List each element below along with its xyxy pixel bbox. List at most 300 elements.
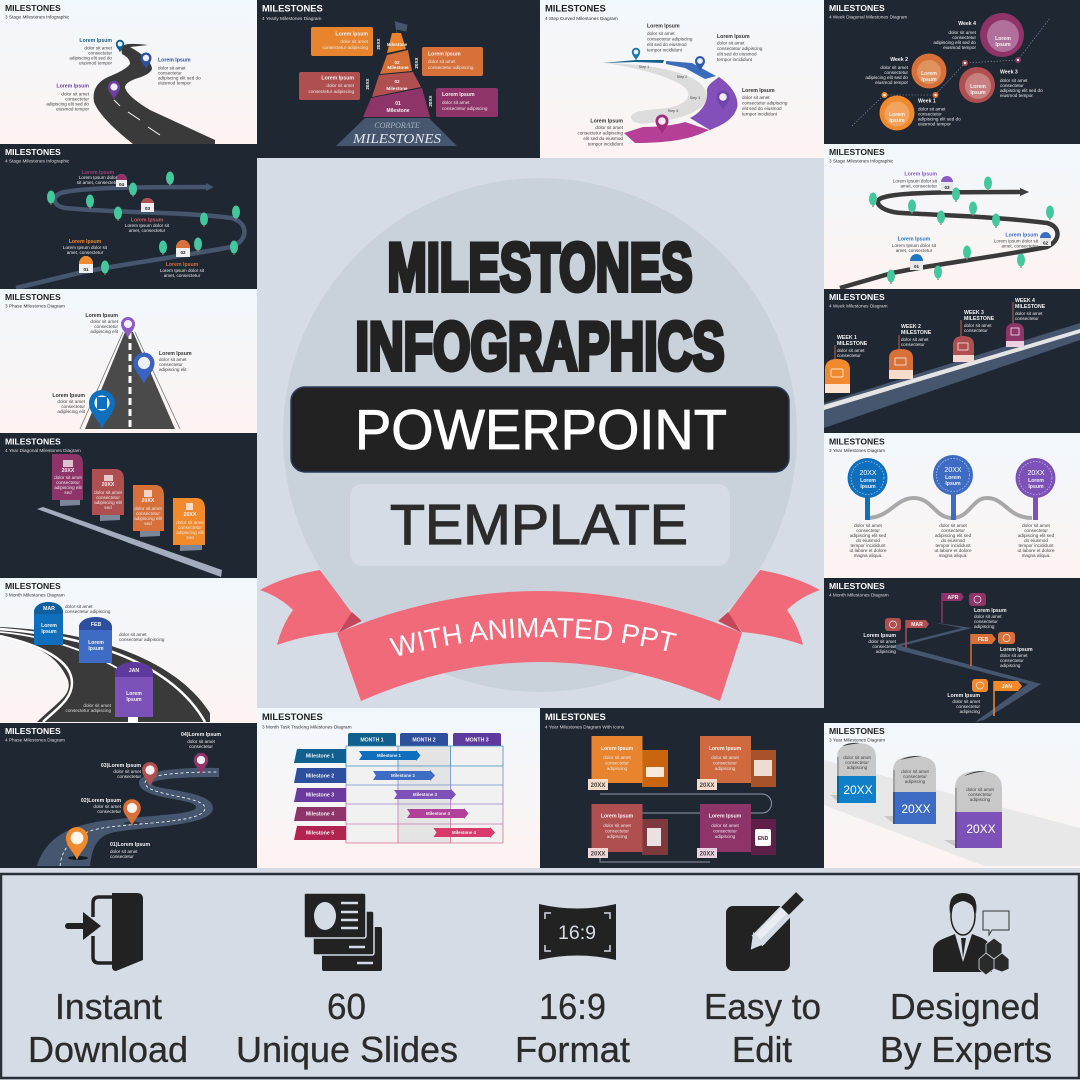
panel: 4 month flags on zigzag road: consectetur [1000,658,1024,663]
panel: 4 yearly pyramid: MILESTONES [352,132,441,147]
panel: 3 phase straight road: dolor sit amet [57,399,86,404]
panel: 3 month task tracking table: Milestone 4 [452,830,477,835]
panel: 3 year lollipop timeline: Ipsum [860,484,876,490]
panel: 4 step curved diagram: consectetur adipiscing [717,46,763,51]
panel: 3 stage light road with trees: Lorem Ipsum dolor sit [893,178,938,184]
panel: 3 phase straight road: dolor sit amet [159,357,187,362]
panel: 4 month flags on zigzag road: dolor sit amet [868,639,897,644]
panel: 3 year tombstone markers: adipiscing [905,779,926,784]
panel: 4 year diagonal cards [0,433,257,578]
panel: 3 stage light road with trees: amet, consectetur [896,248,933,253]
panel: 3 month task tracking table: Milestone 3 [413,792,438,797]
panel: 3 month task tracking table: Milestone 2 [391,773,416,778]
panel: 3 month road with markers: dolor sit amet [65,604,93,609]
panel: 4 step curved diagram: Lorem Ipsum [717,34,750,40]
panel: 4 week diagonal diagram: Ipsum [970,90,986,96]
panel: 4 month flags on zigzag road: adipiscing [876,649,896,654]
panel: 3 stage light road with trees: 02 [1043,240,1048,246]
panel: 4 year diagram with icons: dolor sit amet [603,755,632,760]
title line two: INFOGRAPHICS [356,308,724,384]
panel: 3 year lollipop timeline: magna aliqua. [939,553,967,558]
panel: 4 yearly pyramid: consectetur adipiscing [323,45,368,50]
panel: 4 step curved diagram: dolor sit amet [742,95,770,100]
panel: 4 yearly pyramid: 02 [394,79,400,84]
panel: 4 week ascending road: WEEK 3 [964,310,984,316]
panel: 3 month road with markers: consectetur adipiscing [65,609,111,614]
panel: 4 year diagonal cards: 20XX [184,512,197,518]
panel: 3 month task tracking table: Milestone 3 [306,792,334,798]
label: instant download: Download [28,1029,188,1070]
panel: 4 yearly pyramid: Milestone [387,42,408,47]
panel: 4 yearly pyramid: Milestone [387,65,409,70]
panel: 3 year tombstone markers: consectetur [903,774,927,779]
template badge: TEMPLATE [390,493,688,557]
panel: 4 yearly pyramid: Lorem Ipsum [321,76,354,82]
panel: 4 step curved diagram: tempor incididunt [742,112,778,116]
panel: 3 year lollipop timeline: do eiusmod [856,538,880,543]
panel: 3 stage road infographic: eiusmod tempor [56,106,89,112]
label: 16:9 format: 16:9 [539,986,606,1027]
panel: 3 year tombstone markers: MILESTONES [829,726,885,736]
panel: 4 week ascending road: WEEK 4 [1015,298,1035,304]
panel: 3 stage light road with trees: 03 [944,185,950,190]
powerpoint badge [291,387,789,472]
panel: 4 year diagram with icons: Lorem Ipsum [709,746,742,752]
panel: 4 stage dark road: 02 [180,250,186,255]
label: 16:9 format: Format [515,1029,630,1070]
panel: 4 yearly pyramid: dolor sit amet [340,39,369,44]
panel: 3 month task tracking table: Milestone 1 [377,753,402,758]
panel: 4 year diagonal cards: consectetur [178,525,202,530]
panel: 3 month road with markers: JAN [129,668,139,674]
panel: 3 stage road infographic: adipiscing elit sed do [46,102,89,106]
panel: 3 stage road infographic: dolor sit amet [61,92,90,96]
panel: 4 month flags on zigzag road: dolor sit amet [952,699,981,704]
panel: 3 month task tracking table: Milestone 2 [306,774,334,780]
panel: 4 yearly pyramid: dolor sit amet [428,59,456,64]
panel: 3 phase straight road: MILESTONES [5,292,61,302]
panel: 4 year diagonal cards: dolor sit amet [176,520,205,525]
label: easy to edit: Edit [732,1029,792,1070]
panel: 4 year diagram with icons: 20XX [700,852,714,858]
panel: 3 phase straight road: Lorem Ipsum [159,351,192,357]
panel: 4 month flags on zigzag road: adipiscing [1000,663,1021,668]
panel: 4 month flags on zigzag road: adipiscing [960,709,980,714]
panel: 3 stage road infographic: Lorem Ipsum [56,84,89,90]
panel: 4 month flags on zigzag road: consectetur [974,619,998,624]
panel: 4 year diagonal cards: sed [144,521,152,526]
panel: 4 month flags on zigzag road: Lorem Ipsum [947,693,980,699]
panel: 3 year lollipop timeline: consectetur [1024,528,1048,533]
panel: 3 year lollipop timeline: MILESTONES [829,436,885,446]
panel: 3 stage road infographic: dolor sit amet [84,46,113,50]
panel: 4 stage dark road: amet, consectetur [164,273,201,278]
panel: 3 phase straight road: consectetur [94,324,118,329]
panel: 3 stage road infographic [0,0,257,144]
panel: 4 step curved diagram: elit sed do eiusmod [647,42,687,47]
panel: 3 stage light road with trees: Lorem Ipsum [898,236,931,242]
panel: 4 year diagonal cards: adipiscing elit [134,516,163,521]
label: 60 unique slides: Unique Slides [236,1029,458,1070]
icon: 16:9 screen: 16:9 [558,923,596,944]
panel: 4 week ascending road: 4 Week Milestones Diagram [829,304,888,308]
panel: 4 stage dark road: Lorem Ipsum dolor sit [63,245,108,250]
panel: 4 week ascending road: dolor sit amet [837,348,865,353]
panel: 3 year lollipop timeline: Lorem [860,478,876,484]
panel: 4 year diagram with icons: 20XX [700,783,714,789]
panel: 3 year tombstone markers: 20XX [843,783,873,797]
panel: 3 year lollipop timeline: ut labore et dolore [934,548,972,553]
panel: 4 week diagonal diagram: Week 3 [1000,70,1018,76]
panel: 4 step curved diagram: Step 3 [690,96,700,100]
panel: 4 yearly pyramid: CORPORATE [374,121,420,130]
curved track [605,63,707,123]
panel: 4 week diagonal diagram: 4 Week Diagonal Milestones Diagram [829,14,907,20]
panel: 3 month task tracking table: Milestone 4 [426,811,451,816]
panel: 4 stage dark road: Lorem Ipsum dolor [79,175,118,180]
panel: 4 week diagonal diagram: dolor sit amet [948,30,977,35]
panel: 4 year diagram with icons: adipiscing [715,766,736,771]
panel: 4 week diagonal diagram: eiusmod tempor [875,80,908,85]
panel: 4 phase dark S road: dolor sit amet [113,769,142,774]
panel: 4 phase dark S road: MILESTONES [5,726,61,736]
panel: 4 yearly pyramid: 4 Yearly Milestones Diagram [262,16,321,21]
panel: 4 week diagonal diagram: MILESTONES [829,3,885,13]
panel: 4 month flags on zigzag road: FEB [978,637,988,643]
panel: 4 week diagonal diagram: consectetur [1000,83,1024,88]
panel: 3 month road with markers: MILESTONES [5,581,61,591]
panel: 4 year diagram with icons: consectetur [605,828,629,834]
panel: 3 year lollipop timeline: magna aliqua. [854,553,882,558]
panel: 4 year diagonal cards: consectetur [56,480,80,485]
panel: 3 month road with markers: consectetur adipiscing [66,708,111,713]
panel: 3 year lollipop timeline: 3 Year Milestones Diagram [829,448,885,453]
panel: 4 yearly pyramid: 20XX [376,37,381,50]
panel: 3 month road with markers: Ipsum [41,629,57,635]
panel: 4 week diagonal diagram: Week 1 [918,98,936,104]
panel: 3 month task tracking table: MONTH 1 [360,738,384,744]
panel: 4 step curved diagram: MILESTONES [545,2,606,14]
panel: 3 stage light road with trees: amet, consectetur [900,184,937,188]
panel: 4 yearly pyramid: Milestone [386,86,408,91]
panel: 4 month flags on zigzag road: adipiscing [974,624,995,629]
panel: 3 month task tracking table: MONTH 2 [412,738,436,744]
panel: 3 stage light road with trees: Lorem Ipsum dolor sit [994,238,1039,244]
panel: 4 stage dark road: 4 Stage Milestones Infographic [5,158,70,164]
panel: 4 year diagram with icons: consectetur [713,760,737,766]
panel: 4 week diagonal diagram: adipiscing elit sed do [865,75,908,80]
panel: 3 year lollipop timeline: ut labore et dolore [849,548,887,553]
panel: 3 stage road infographic: consectetur [88,50,112,56]
panel: 3 year tombstone markers: adipiscing [847,765,868,770]
panel: 4 step curved diagram: 4 Step Curved Milestones Diagram [545,16,618,21]
panel: 4 month flags on zigzag road: MAR [911,622,923,628]
panel: 4 stage dark road: Lorem Ipsum dolor sit [160,268,205,273]
panel: 4 phase dark S road: 4 Phase Milestones Diagram [5,738,65,742]
panel: 4 stage dark road: amet, consectetur [129,228,166,233]
panel: central hero [260,178,820,701]
panel: 4 week diagonal diagram: dolor sit amet [880,65,909,70]
panel: 4 yearly pyramid: 20XX [365,77,370,90]
panel: 4 week diagonal diagram: dolor sit amet [918,106,946,112]
panel: 4 week diagonal diagram: Lorem [889,112,905,118]
panel: 4 year diagonal cards: 4 Year Diagonal Milestones Diagram [5,448,81,453]
panel: 3 stage road infographic: dolor sit amet [158,66,186,70]
panel: 4 step curved diagram: dolor sit amet [595,125,624,130]
panel: 3 year lollipop timeline: do eiusmod [1024,538,1048,543]
panel: 3 year tombstone markers: dolor sit amet [901,769,930,774]
panel: 3 stage light road with trees: 01 [914,264,919,269]
panel: 3 stage road infographic: Lorem Ipsum [79,38,112,44]
panel: 3 month road with markers: consectetur adipiscing [119,637,165,642]
panel: 4 week ascending road: WEEK 1 [837,335,857,341]
panel: 4 week diagonal diagram [824,0,1080,144]
panel: 3 stage light road with trees: amet, consectetur [1001,244,1038,248]
panel: 3 year tombstone markers: 20XX [966,822,996,836]
panel: 3 year lollipop timeline: tempor incididunt [1019,543,1054,548]
panel: 3 month task tracking table: 3 Month Task Tracking Milestones Diagram [262,724,352,730]
panel: 4 week ascending road: consectetur [964,328,988,333]
panel: 3 year lollipop timeline: 20XX [1027,470,1045,477]
panel: 3 stage road infographic: eiusmod tempor [158,80,191,86]
panel: 4 yearly pyramid: Lorem Ipsum [335,32,368,38]
panel: 3 month road with markers: Lorem [88,640,104,646]
panel: 4 yearly pyramid: 01 [395,101,401,107]
panel: 3 stage road infographic: 3 Stage Milestones Infographic [5,14,70,20]
panel: 4 yearly pyramid [257,0,540,158]
panel: 3 phase straight road: consectetur [159,362,183,367]
panel: 4 year diagonal cards: dolor sit amet [54,475,83,480]
panel: 4 year diagonal cards: adipiscing elit [94,500,123,505]
panel: 4 year diagonal cards: 20XX [62,468,75,474]
panel: 4 stage dark road: 03 [145,206,150,211]
panel: 4 phase dark S road: 03)Lorem Ipsum [101,763,141,769]
panel: 3 year lollipop timeline: do eiusmod [941,538,965,543]
panel: 4 month flags on zigzag road: MILESTONES [829,581,885,591]
panel: 3 year lollipop timeline: consectetur [856,528,880,533]
panel: 3 month road with markers: FEB [91,622,101,628]
panel: 4 year diagram with icons: consectetur [713,828,737,834]
panel: 3 month road with markers: dolor sit amet [119,632,147,637]
panel: 4 year diagram with icons: adipiscing [715,834,736,839]
panel: 4 week diagonal diagram: Week 2 [890,57,908,63]
panel: 4 week diagonal diagram: eiusmod tempor [943,45,976,50]
panel: 4 step curved diagram: Step 4 [668,109,678,113]
panel: 4 week ascending road: dolor sit amet [964,323,992,328]
panel: 4 yearly pyramid: dolor sit amet [442,100,470,105]
panel: 4 yearly pyramid: Milestone [386,108,410,114]
panel: 4 year diagram with icons: dolor sit amet [603,823,632,828]
panel: 4 week ascending road: consectetur [837,353,861,358]
panel: 3 stage road infographic: Lorem Ipsum [158,58,191,64]
panel: 3 month task tracking table: MILESTONES [262,711,323,722]
panel: 4 month flags on zigzag road: dolor sit amet [1000,653,1028,658]
panel: 4 step curved diagram: elit sed do eiusmod [742,106,782,111]
panel: 4 year diagonal cards: adipiscing elit [54,485,83,490]
panel: 4 step curved diagram: Step 2 [677,75,687,79]
panel: 3 stage light road with trees: MILESTONES [829,147,885,157]
panel: 4 week ascending road: MILESTONE [1015,304,1046,310]
panel: 3 year tombstone markers: 20XX [901,802,931,816]
panel: feature strip [1,874,1079,1078]
panel: 4 yearly pyramid: consectetur adipiscing [428,65,474,70]
panel: 3 phase straight road: 3 Phase Milestones Diagram [5,304,65,308]
panel: 4 week ascending road: dolor sit amet [901,337,929,342]
panel: 3 year tombstone markers: 3 Year Milestones Diagram [829,738,885,742]
ribbon banner [260,570,820,701]
icon: expert person [933,893,1009,975]
panel: 4 year diagonal cards: sed [64,490,72,495]
panel: 3 month task tracking table: MONTH 3 [465,738,489,744]
panel: 4 stage dark road: Lorem Ipsum [69,239,102,245]
panel: 4 step curved diagram: consectetur adipiscing [647,36,693,42]
panel: 4 stage dark road: amet, consectetur [67,250,104,255]
panel: 3 phase straight road: Lorem Ipsum [85,313,118,319]
panel: 3 month road with markers: Lorem [41,623,57,629]
ribbon banner: WITH ANIMATED PPT [389,618,677,656]
panel: 4 year diagonal cards: dolor sit amet [94,490,123,495]
panel: 3 year lollipop timeline: consectetur [941,528,965,533]
panel: 4 step curved diagram: dolor sit amet [717,40,745,46]
panel: 4 stage dark road: Lorem Ipsum [166,262,199,268]
panel: 4 step curved diagram: Lorem Ipsum [742,88,775,94]
panel: 3 year lollipop timeline: dolor sit amet [1022,523,1051,528]
panel: 4 yearly pyramid: 02 [394,60,400,65]
panel: 4 week ascending road: consectetur [1015,316,1039,321]
panel: 4 phase dark S road: dolor sit amet [187,739,216,744]
panel: 3 phase straight road: adipiscing elit [159,367,187,372]
panel: 3 year lollipop timeline: dolor sit amet [939,523,968,528]
panel: 4 step curved diagram: tempor incididunt [647,48,683,52]
panel: 4 week diagonal diagram: Ipsum [995,42,1011,48]
panel: 4 year diagram with icons: Lorem Ipsum [601,746,634,752]
panel: 4 step curved diagram: Step 1 [639,65,649,69]
panel: 3 stage light road with trees: Lorem Ipsum [904,172,937,178]
panel: 4 phase dark S road [0,723,257,868]
panel: 4 yearly pyramid: dolor sit amet [326,83,355,88]
panel: 4 month flags on zigzag road: Lorem Ipsum [974,608,1007,614]
panel: 3 stage light road with trees: Lorem Ipsum [1005,232,1038,238]
panel: 4 stage dark road: Lorem Ipsum [82,170,115,176]
panel: 4 month flags on zigzag road: consectetur [872,644,896,649]
panel: 3 month task tracking table: Milestone 1 [306,754,334,760]
panel: 3 year lollipop timeline: Ipsum [1028,484,1044,490]
panel: 3 year tombstone markers: dolor sit amet [966,787,995,792]
panel: 4 year diagram with icons: 20XX [591,852,605,858]
panel: 4 phase dark S road: consectetur [97,809,121,814]
panel: 3 year lollipop timeline: adipiscing elit sed [850,533,887,538]
panel: 3 year lollipop timeline: Lorem [945,475,961,481]
panel: 4 year diagram with icons: dolor sit amet [711,823,740,828]
panel: 4 yearly pyramid: 20XX [428,94,433,107]
panel: 4 yearly pyramid: MILESTONES [262,2,323,14]
panel: 4 week diagonal diagram: consectetur [884,70,908,75]
panel: 4 step curved diagram: consectetur adipiscing [578,130,623,136]
panel: 4 month flags on zigzag road: dolor sit amet [974,614,1002,619]
panel: 4 yearly pyramid: Lorem Ipsum [442,92,475,98]
panel: 3 year tombstone markers: consectetur [845,760,869,765]
panel: 4 step curved diagram: Lorem Ipsum [590,118,623,124]
panel: 3 year lollipop timeline: Lorem [1028,478,1044,484]
panel: 4 year diagram with icons: Lorem Ipsum [709,814,742,820]
panel: 4 year diagonal cards: adipiscing elit [176,530,205,535]
panel: 3 stage light road with trees [824,144,1080,289]
panel: 4 year diagonal cards: sed [104,505,112,510]
panel: 3 month task tracking table: Milestone 4 [306,812,334,818]
panel: 4 year diagonal cards: 20XX [102,482,115,488]
panel: 4 phase dark S road: consectetur [110,854,134,859]
panel: 4 week ascending road: dolor sit amet [1015,311,1043,316]
panel: 3 year lollipop timeline: Ipsum [945,481,961,487]
panel: 4 week diagonal diagram: Week 4 [958,21,976,27]
panel: 4 step curved diagram: elit sed do eiusmod [583,136,623,141]
panel: 3 stage road infographic: adipiscing elit sed do [69,56,112,60]
panel: 3 year lollipop timeline: ut labore et dolore [1017,548,1055,553]
panel: 3 stage road infographic: adipiscing elit sed do [158,76,201,80]
panel: 4 year diagram with icons: consectetur [605,760,629,766]
panel: 3 year lollipop timeline: 20XX [859,470,877,477]
panel: 4 step curved diagram: dolor sit amet [647,31,675,36]
panel: 4 step curved diagram [540,0,824,158]
icon: 16:9 screen [539,904,616,960]
panel: 3 year lollipop timeline: adipiscing elit sed [935,533,972,538]
panel: 4 year diagonal cards: consectetur [96,495,120,500]
label: designed by experts: Designed [890,986,1040,1027]
panel: 4 year diagram with icons: dolor sit amet [711,755,740,760]
panel: 4 week diagonal diagram: Lorem [921,71,937,77]
panel: 3 year lollipop timeline: 20XX [944,467,962,474]
panel: 4 week ascending road: MILESTONE [901,330,932,336]
panel: 3 year tombstone markers: dolor sit amet [843,755,872,760]
panel: 4 year diagram with icons: adipiscing [607,766,628,771]
panel: 4 week ascending road: MILESTONE [837,341,868,347]
panel: 3 month road with markers: MAR [43,606,55,612]
pyramid [387,33,406,53]
hero circle [283,178,797,692]
panel: 4 week diagonal diagram: dolor sit amet [1000,78,1028,83]
panel: 4 phase dark S road: dolor sit amet [110,849,138,854]
panel: 4 month flags on zigzag road: 4 Month Milestones Diagram [829,592,889,598]
panel: 4 year diagram with icons: END [758,836,769,842]
icon: instant download door [68,893,143,971]
panel: 4 month flags on zigzag road: APR [948,595,959,601]
panel: 4 yearly pyramid: 20XX [414,56,419,69]
powerpoint badge: POWERPOINT [355,398,727,462]
panel: 3 phase straight road [0,289,257,433]
panel: 4 week ascending road: WEEK 2 [901,324,921,330]
panel: 3 stage light road with trees: Lorem Ipsum dolor sit [892,243,937,248]
panel: 4 week diagonal diagram: Ipsum [921,77,937,83]
panel: 3 year tombstone markers [824,723,1080,868]
panel: 4 phase dark S road: consectetur [189,744,213,749]
panel: 4 month flags on zigzag road: consectetur [956,704,980,709]
panel: 4 stage dark road: 01 [83,267,89,272]
panel: 3 month road with markers: Ipsum [126,697,142,703]
panel: 4 year diagram with icons: MILESTONES [545,711,606,722]
panel: 4 month flags on zigzag road [824,578,1080,723]
panel: 4 week diagonal diagram: Lorem [970,84,986,90]
panel: 4 week diagonal diagram: consectetur [918,112,942,116]
panel: 4 step curved diagram: Lorem Ipsum [647,24,680,30]
panel: 3 year lollipop timeline: tempor incididunt [851,543,886,548]
panel: 4 week diagonal diagram: consectetur [952,35,976,40]
panel: 4 year diagram with icons: 20XX [591,783,605,789]
panel: 4 step curved diagram: elit sed do eiusmod [717,52,757,56]
panel: 3 month road with markers: Lorem [126,691,142,697]
panel: 3 stage road infographic: consectetur [158,70,182,76]
panel: 4 week diagonal diagram: adipiscing elit sed do [1000,88,1043,93]
panel: 4 year diagram with icons: adipiscing [607,834,628,839]
